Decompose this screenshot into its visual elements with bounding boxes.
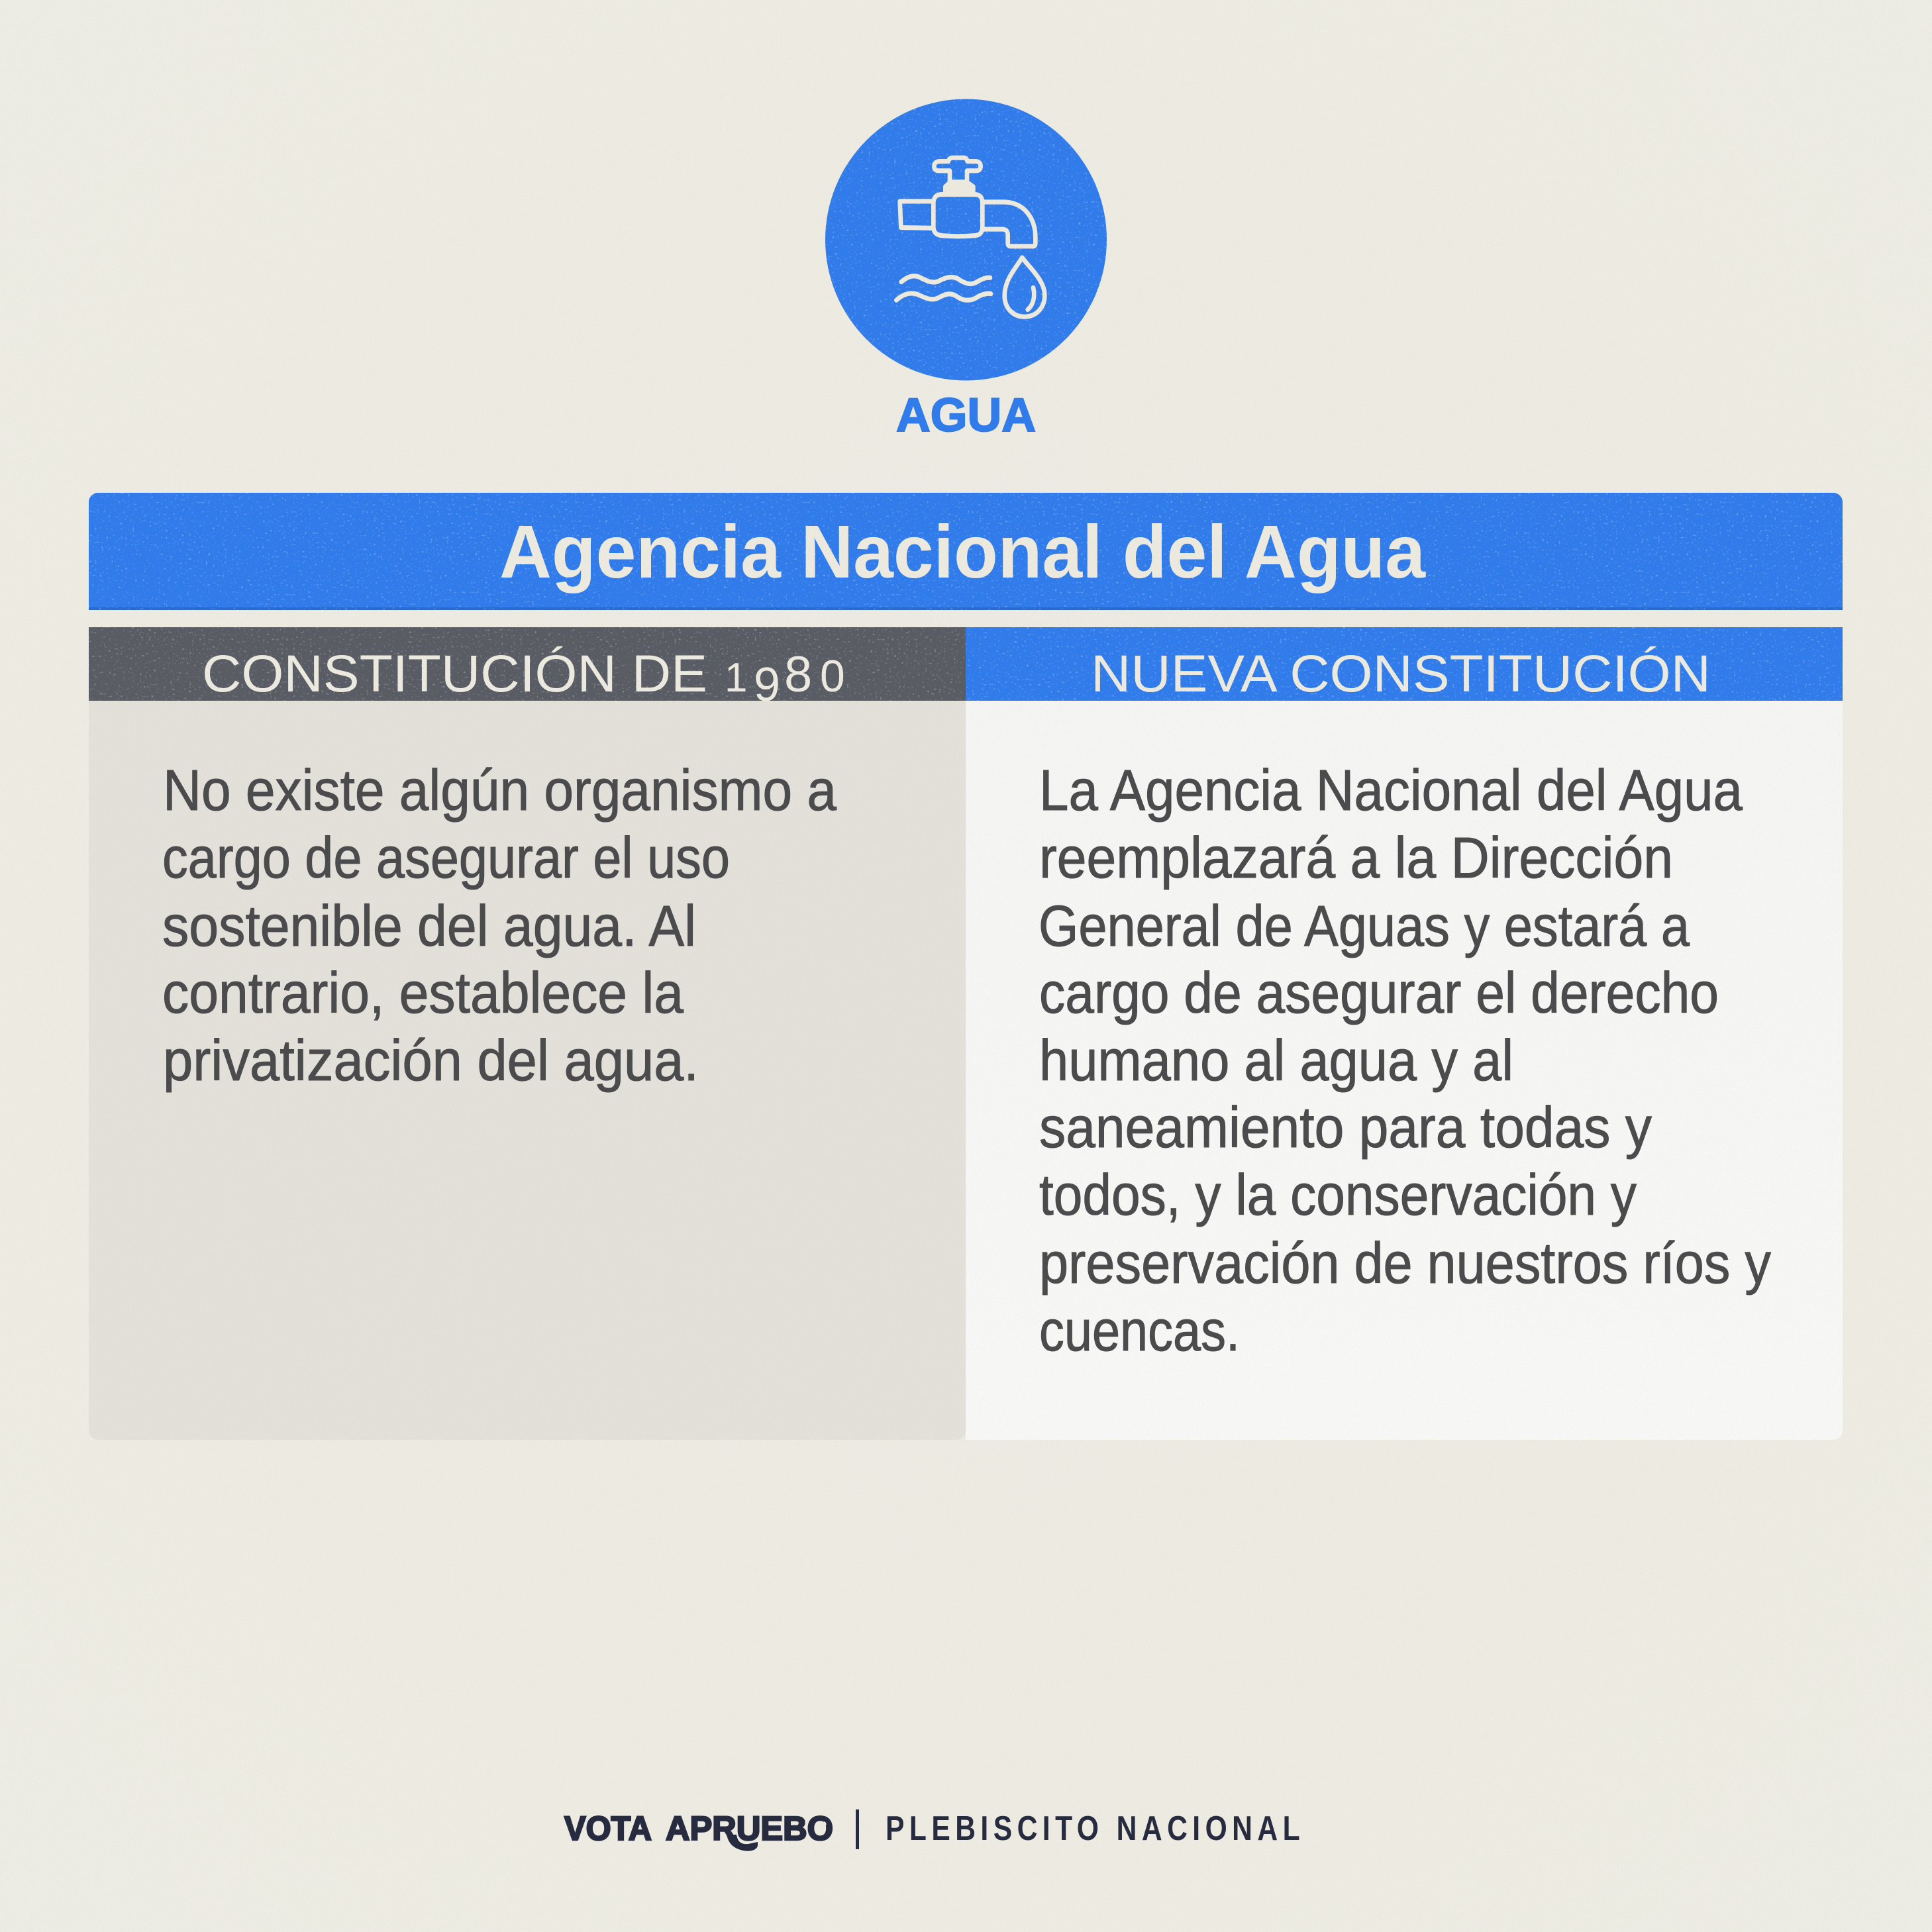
text block: current constitution xyxy=(162,758,837,1093)
column header: Constitución de 1980: 9 xyxy=(754,658,780,711)
column header: Constitución de 1980: 0 xyxy=(820,651,845,701)
footer: Vota Apruebo | Plebiscito Nacional xyxy=(564,1809,1300,1851)
text block: new constitution: humano al agua y al xyxy=(1039,1029,1513,1093)
column header: Constitución de 1980: 1 xyxy=(725,655,747,701)
title bar: Agencia Nacional del Agua xyxy=(89,493,1843,610)
divider xyxy=(856,1809,859,1849)
column header: Nueva Constitución xyxy=(966,627,1843,703)
title bar: Agencia Nacional del Agua: Agencia Nacional del Agua xyxy=(499,510,1426,593)
panel: Nueva Constitución xyxy=(966,627,1843,1440)
text: Plebiscito Nacional: PLEBISCITO NACIONAL xyxy=(886,1809,1300,1848)
icon: faucet and water drop line art xyxy=(896,158,1044,317)
text block: new constitution: saneamiento para todas y xyxy=(1039,1095,1652,1160)
text block: current constitution: cargo de asegurar el uso xyxy=(162,826,730,890)
text block: current constitution: privatización del agua. xyxy=(163,1029,699,1093)
text block: current constitution: No existe algún organismo a xyxy=(163,758,837,823)
logo: Vota Apruebo xyxy=(564,1809,833,1851)
text block: new constitution: cargo de asegurar el derecho xyxy=(1039,961,1719,1025)
text block: new constitution: preservación de nuestros ríos y xyxy=(1039,1231,1771,1296)
heading: AGUA: AGUA xyxy=(896,389,1036,442)
logo: Vota Apruebo: VOTA xyxy=(564,1809,652,1847)
panel: Constitución de 1980 xyxy=(89,627,966,1440)
column header: Constitución de 1980 xyxy=(89,627,966,711)
logo: Vota Apruebo: APRUEBO xyxy=(666,1809,833,1847)
text block: new constitution: todos, y la conservación y xyxy=(1039,1163,1637,1227)
text block: new constitution xyxy=(1039,758,1771,1363)
icon: blue water faucet badge xyxy=(825,99,1107,380)
text block: new constitution: reemplazará a la Dirección xyxy=(1039,826,1673,890)
column header: Constitución de 1980: CONSTITUCIÓN DE xyxy=(202,644,707,703)
text block: current constitution: contrario, establece la xyxy=(162,961,684,1025)
text block: new constitution: cuencas. xyxy=(1039,1299,1240,1363)
text block: current constitution: sostenible del agua. Al xyxy=(162,894,696,958)
column header: Constitución de 1980: 8 xyxy=(784,646,812,703)
text block: new constitution: La Agencia Nacional del Agua xyxy=(1039,758,1743,823)
column header: Nueva Constitución: NUEVA CONSTITUCIÓN xyxy=(1091,644,1711,703)
text block: new constitution: General de Aguas y estará a xyxy=(1039,894,1690,958)
